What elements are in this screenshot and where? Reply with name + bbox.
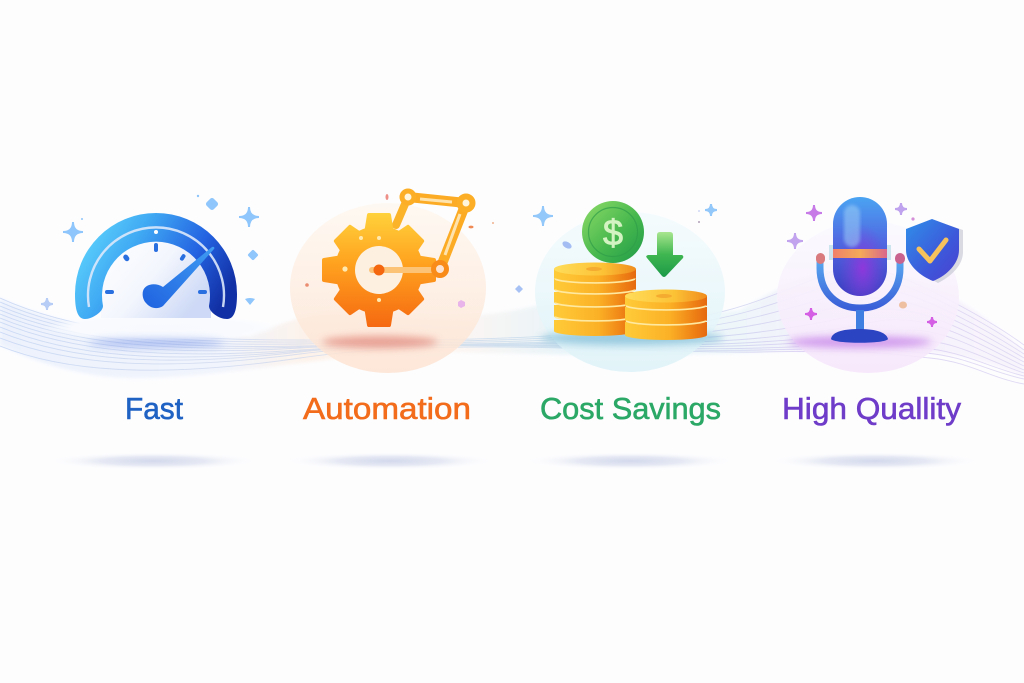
gauge inner light arc <box>88 227 224 307</box>
label: fast: Fast <box>125 391 183 426</box>
arm link across gear <box>372 267 441 273</box>
automation particles <box>305 194 494 308</box>
quality sparkles <box>787 203 937 327</box>
left coin stack <box>554 262 636 336</box>
mic capsule <box>833 197 887 296</box>
fast sparkles <box>41 195 259 310</box>
gear halo circle <box>290 203 486 373</box>
gauge ticks <box>105 230 207 294</box>
cost sparkles <box>515 204 717 293</box>
right coin stack <box>625 290 707 340</box>
gauge dial <box>101 239 211 318</box>
dollar coin: $ <box>603 212 623 253</box>
mic ground shadow <box>788 336 932 348</box>
coin halo circle <box>535 212 725 372</box>
mic side tabs <box>829 245 891 260</box>
mic band <box>833 249 887 258</box>
label: cost savings: Cost Savings <box>540 391 721 426</box>
flowing wave lines <box>0 263 1024 384</box>
gear ground shadow <box>322 336 438 348</box>
gear body <box>322 213 436 327</box>
label: high quality: High Quallity <box>782 391 961 426</box>
shield <box>906 219 963 283</box>
mic yoke caps <box>816 253 825 264</box>
gauge arc <box>75 213 237 319</box>
down arrow <box>646 232 683 277</box>
gauge ground shadow <box>88 339 224 347</box>
gauge needle <box>143 247 214 308</box>
panel: cost savings <box>515 201 725 372</box>
elbow joint <box>434 262 446 276</box>
floor shadows <box>48 452 980 470</box>
mic base <box>831 329 888 343</box>
mic halo circle <box>777 221 959 373</box>
dollar coin <box>582 201 644 263</box>
coin ground shadow <box>540 331 724 345</box>
infographic canvas <box>0 188 1024 468</box>
mic capsule core glow <box>833 197 887 296</box>
mic capsule highlight <box>844 205 860 247</box>
label: automation: Automation <box>303 391 471 426</box>
gauge base glow <box>42 315 278 341</box>
panel: high quality <box>777 197 963 373</box>
gear rivets <box>342 236 381 302</box>
robot arm <box>396 191 472 269</box>
gear centre hole <box>355 246 403 294</box>
background ribbon wash <box>0 268 1024 378</box>
panel: automation <box>290 191 494 373</box>
mic yoke <box>820 260 900 308</box>
mic stand <box>856 310 864 334</box>
panel: fast <box>41 195 278 347</box>
